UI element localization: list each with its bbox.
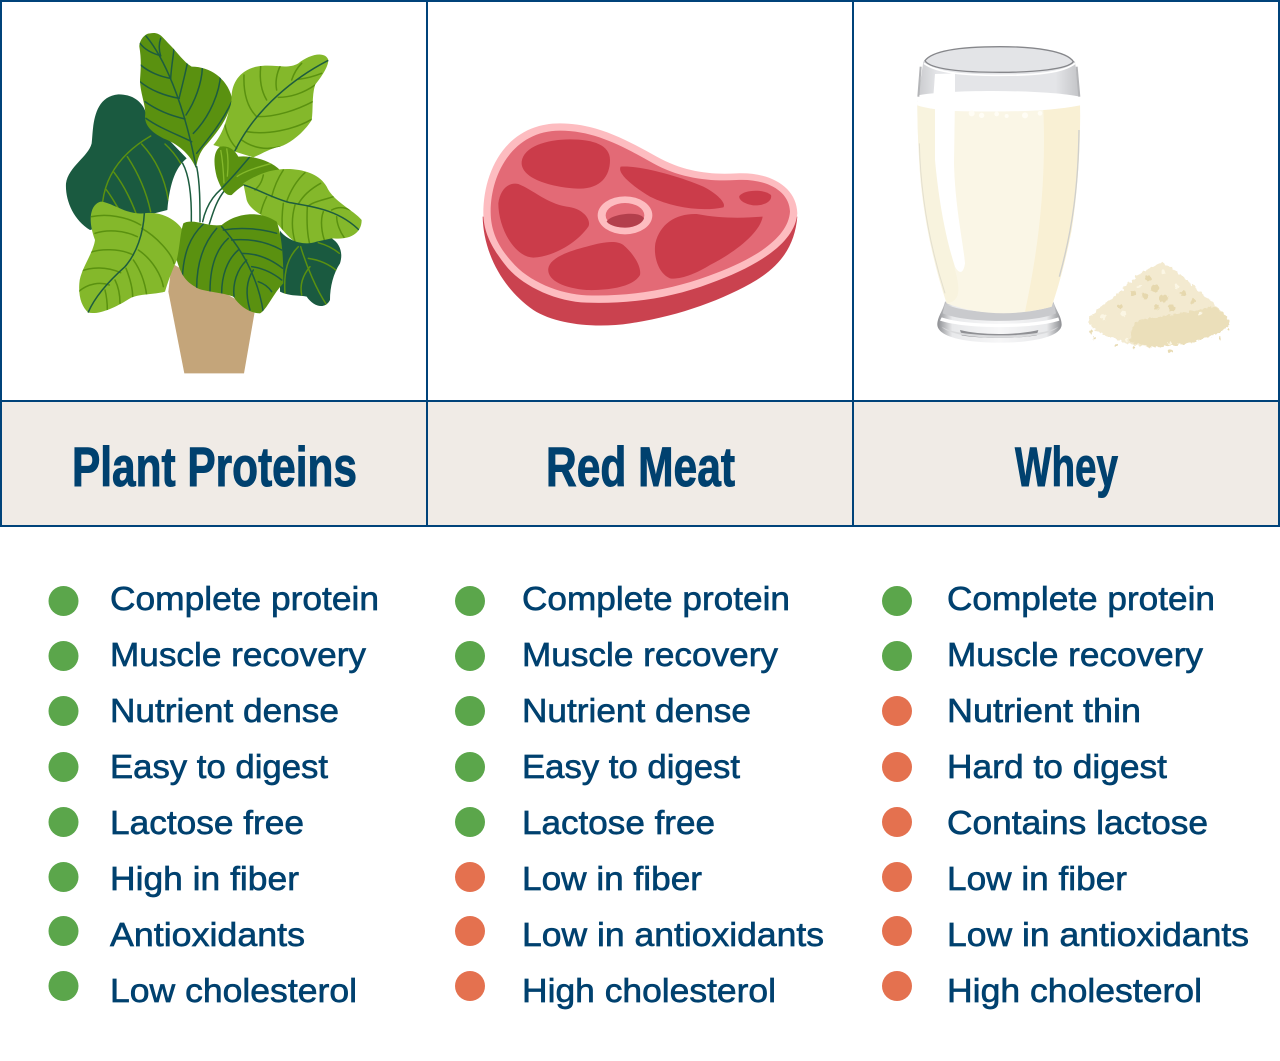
row: Antioxidants: Antioxidants xyxy=(110,917,305,954)
icon: red meat steak xyxy=(483,123,797,325)
glass base xyxy=(937,302,1062,343)
row: Nutrient thin: Nutrient thin xyxy=(947,693,1141,730)
heading: Whey: Whey xyxy=(1015,435,1118,498)
heading: Red Meat: Red Meat xyxy=(546,435,735,498)
row: Complete protein: Complete protein xyxy=(110,581,379,618)
row: High cholesterol: High cholesterol xyxy=(522,973,776,1010)
row: Muscle recovery: Muscle recovery xyxy=(947,637,1203,674)
row: Low cholesterol: Low cholesterol xyxy=(110,973,357,1010)
milk xyxy=(917,104,1080,313)
panel: column header backgrounds xyxy=(0,401,1280,526)
row: Low in fiber: Low in fiber xyxy=(522,861,702,898)
row: Easy to digest: Easy to digest xyxy=(110,749,329,786)
heading: Plant Proteins: Plant Proteins xyxy=(72,435,357,498)
row: Muscle recovery: Muscle recovery xyxy=(522,637,778,674)
table grid lines xyxy=(0,0,1280,527)
icon: glass of whey and powder pile xyxy=(917,47,1230,352)
row: Complete protein: Complete protein xyxy=(522,581,790,618)
list: whey attributes xyxy=(882,581,1249,1010)
row: Complete protein: Complete protein xyxy=(947,581,1215,618)
icon: potted plant xyxy=(66,33,362,373)
row: Nutrient thin xyxy=(882,693,1141,730)
glass upper xyxy=(917,53,1080,102)
row: Nutrient dense: Nutrient dense xyxy=(522,693,751,730)
row: Low in antioxidants: Low in antioxidants xyxy=(522,917,824,954)
row: High in fiber: High in fiber xyxy=(110,861,299,898)
row: Nutrient dense: Nutrient dense xyxy=(110,693,339,730)
row: Low in fiber xyxy=(882,861,1127,898)
row: Low in antioxidants: Low in antioxidants xyxy=(947,917,1249,954)
list: plant proteins attributes xyxy=(48,581,379,1010)
row: Low in fiber: Low in fiber xyxy=(947,861,1127,898)
row: Muscle recovery: Muscle recovery xyxy=(110,637,366,674)
row: Low in fiber xyxy=(455,861,702,898)
row: Lactose free: Lactose free xyxy=(110,805,304,842)
row: High cholesterol: High cholesterol xyxy=(947,973,1202,1010)
list: red meat attributes xyxy=(455,581,824,1010)
row: Easy to digest: Easy to digest xyxy=(522,749,741,786)
row: Lactose free: Lactose free xyxy=(522,805,715,842)
row: Antioxidants xyxy=(48,916,305,954)
row: Hard to digest: Hard to digest xyxy=(947,749,1168,786)
row: Contains lactose: Contains lactose xyxy=(947,805,1208,842)
powder pile xyxy=(1087,262,1230,352)
